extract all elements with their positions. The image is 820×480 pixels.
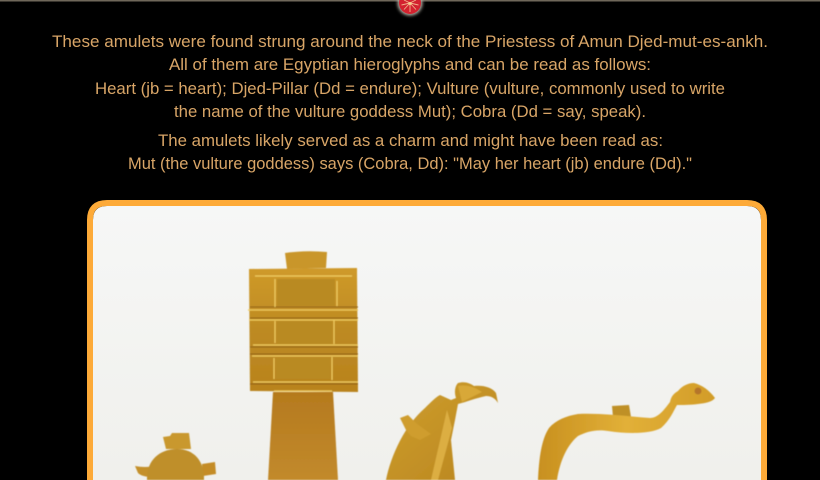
paragraph: reading as a charm: The amulets likely served as a charm and might have been read as: (158, 131, 663, 150)
paragraph: reading as a charm: Mut (the vulture goddess) says (Cobra, Dd): "May her heart (jb) endure (Dd)." (128, 154, 692, 173)
paragraph: reading of each hieroglyph (95, 79, 725, 121)
paragraph: reading of each hieroglyph: Heart (jb = heart); Djed-Pillar (Dd = endure); Vulture (vulture, commonly used to write (95, 79, 725, 98)
paragraph: where the amulets were found (52, 32, 768, 74)
icon: red medallion (398, 0, 422, 16)
amulet: cobra (538, 383, 715, 480)
amulet: heart (135, 433, 216, 480)
amulet: djed pillar (248, 251, 358, 480)
paragraph: reading of each hieroglyph: the name of the vulture goddess Mut); Cobra (Dd = say, speak). (174, 102, 646, 121)
paragraph: where the amulets were found: All of them are Egyptian hieroglyphs and can be read as follows: (169, 55, 651, 74)
paragraph: where the amulets were found: These amulets were found strung around the neck of the Priestess of Amun Djed-mut-es-ankh. (52, 32, 768, 51)
top rule (0, 0, 820, 2)
text block: amulet description (52, 32, 768, 173)
paragraph: reading as a charm (128, 131, 692, 173)
amulet: vulture (386, 382, 498, 480)
photo panel with orange frame (90, 203, 764, 480)
